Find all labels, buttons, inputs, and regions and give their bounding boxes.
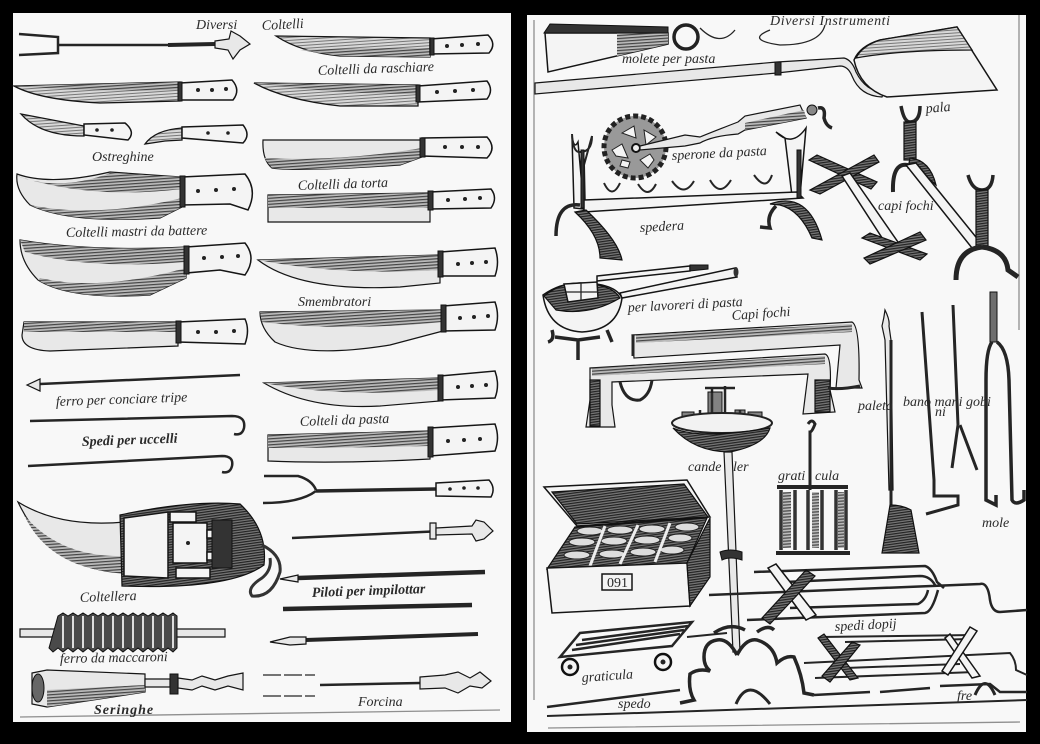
heading: Diversi: Diversi xyxy=(195,18,237,33)
icon: large cleaver xyxy=(20,240,251,296)
panel: left plate, knives and tools xyxy=(13,13,511,722)
icon: spit rack, spedera xyxy=(556,128,822,260)
heading: Coltelli top: Coltelli xyxy=(261,17,304,34)
panel: right plate, instruments xyxy=(527,14,1027,732)
icon: standing gridiron, graticula xyxy=(776,421,850,553)
icon: andirons, capi fochi xyxy=(893,106,1018,280)
label: pala: pala xyxy=(924,100,951,117)
label: Coltelli da torta: Coltelli da torta xyxy=(298,176,388,194)
label: Coltellera: Coltellera xyxy=(80,589,137,606)
label: Spedi per uccelli: Spedi per uccelli xyxy=(82,432,178,450)
label: Seringhe: Seringhe xyxy=(94,703,154,718)
icon: blunt knife xyxy=(22,319,248,351)
icon: bird spit 1 xyxy=(30,416,244,434)
icon: ember shovel, paleta xyxy=(882,310,919,553)
icon: knife, Smembratori xyxy=(258,248,498,288)
label: graticula lower: graticula xyxy=(581,667,633,686)
icon: knife, top right xyxy=(276,35,493,57)
icon: rectangular knife xyxy=(268,189,494,222)
label: per lavoreri di pasta: per lavoreri di pasta xyxy=(626,295,743,316)
label: candeler: cande xyxy=(688,460,721,475)
icon: wide knife right xyxy=(260,302,498,351)
label: Coltelli mastri da battere: Coltelli mastri da battere xyxy=(66,224,207,241)
icon: shovel, pala xyxy=(535,27,997,97)
icon: roasting fork xyxy=(263,476,493,503)
icon: cake knife xyxy=(263,137,492,169)
label: candeler tail: ler xyxy=(733,460,749,475)
icon: larding needle xyxy=(280,572,485,582)
icon: bird spit 2 xyxy=(28,456,232,472)
icon: pastry pan, per lavoreri di pasta xyxy=(543,265,738,360)
icon: syringe, Seringhe xyxy=(32,670,243,707)
label: graticula: grati xyxy=(778,469,805,484)
icon: wheeled gridiron xyxy=(560,622,692,675)
icon: forcina xyxy=(263,672,491,696)
icon: knife 2 right xyxy=(254,81,490,106)
icon: knife case, Coltellera xyxy=(18,502,280,596)
label: ni: ni xyxy=(935,405,946,420)
icon: larding pin xyxy=(292,520,493,541)
label: mole: mole xyxy=(982,516,1009,531)
label: capi fochi: capi fochi xyxy=(878,199,934,214)
icon: double spits upper xyxy=(709,564,1027,624)
icon: needle 3 xyxy=(270,634,478,645)
icon: knife, rectangular lower xyxy=(268,424,498,462)
label: Forcina: Forcina xyxy=(357,695,403,710)
label: Capi fochi: Capi fochi xyxy=(731,305,791,324)
icon: knife, da pasta xyxy=(264,371,498,407)
label: bano mani gobi: bano mani gobi xyxy=(903,395,991,410)
label: chest tag 091: 091 xyxy=(607,576,628,591)
label: molete per pasta: molete per pasta xyxy=(622,52,715,67)
icon: master beating knife xyxy=(17,172,252,219)
label: ferro per conciare tripe: ferro per conciare tripe xyxy=(56,390,188,410)
label: ferro da maccaroni: ferro da maccaroni xyxy=(60,650,168,667)
label: graticula tail: cula xyxy=(815,469,839,484)
icon: tongs, mole xyxy=(986,292,1024,505)
icon: small knives, Ostreghine xyxy=(21,114,247,144)
label: Coltelli da raschiare: Coltelli da raschiare xyxy=(318,60,434,79)
icon: needle 2 xyxy=(283,605,472,609)
icon: candlestick, candeler xyxy=(672,386,772,652)
icon: poker xyxy=(922,312,958,514)
label: sperone da pasta: sperone da pasta xyxy=(671,144,767,164)
heading: Diversi Instrumenti: Diversi Instrumenti xyxy=(769,14,891,29)
icon: long firedogs xyxy=(586,322,862,427)
label: Smembratori: Smembratori xyxy=(298,295,371,310)
icon: tongs small xyxy=(952,305,977,470)
label: Ostreghine: Ostreghine xyxy=(92,150,154,165)
icon: double spits lower xyxy=(687,627,1027,682)
icon: firedog crosses xyxy=(809,155,927,264)
icon: macaroni iron xyxy=(20,613,225,652)
icon: candlestick feet xyxy=(680,627,814,704)
icon: chest of knives xyxy=(544,480,710,613)
icon: pastry wheel xyxy=(604,105,832,178)
label: paleta: paleta xyxy=(857,399,893,414)
label: fre: fre xyxy=(957,689,972,704)
icon: pastry tongs xyxy=(544,24,825,72)
label: spedo: spedo xyxy=(618,697,651,712)
icon: tripe iron xyxy=(27,375,240,391)
icon: knife 1 left xyxy=(14,80,237,103)
icon: spit bottom xyxy=(547,684,1027,716)
label: Piloti per impilottar: Piloti per impilottar xyxy=(312,582,426,601)
label: Coltelli da pasta: Colteli da pasta xyxy=(300,412,390,430)
label: spedi dopij: spedi dopij xyxy=(834,617,897,635)
label: spedera: spedera xyxy=(639,219,684,236)
icon: fork, Diversi xyxy=(19,31,250,59)
